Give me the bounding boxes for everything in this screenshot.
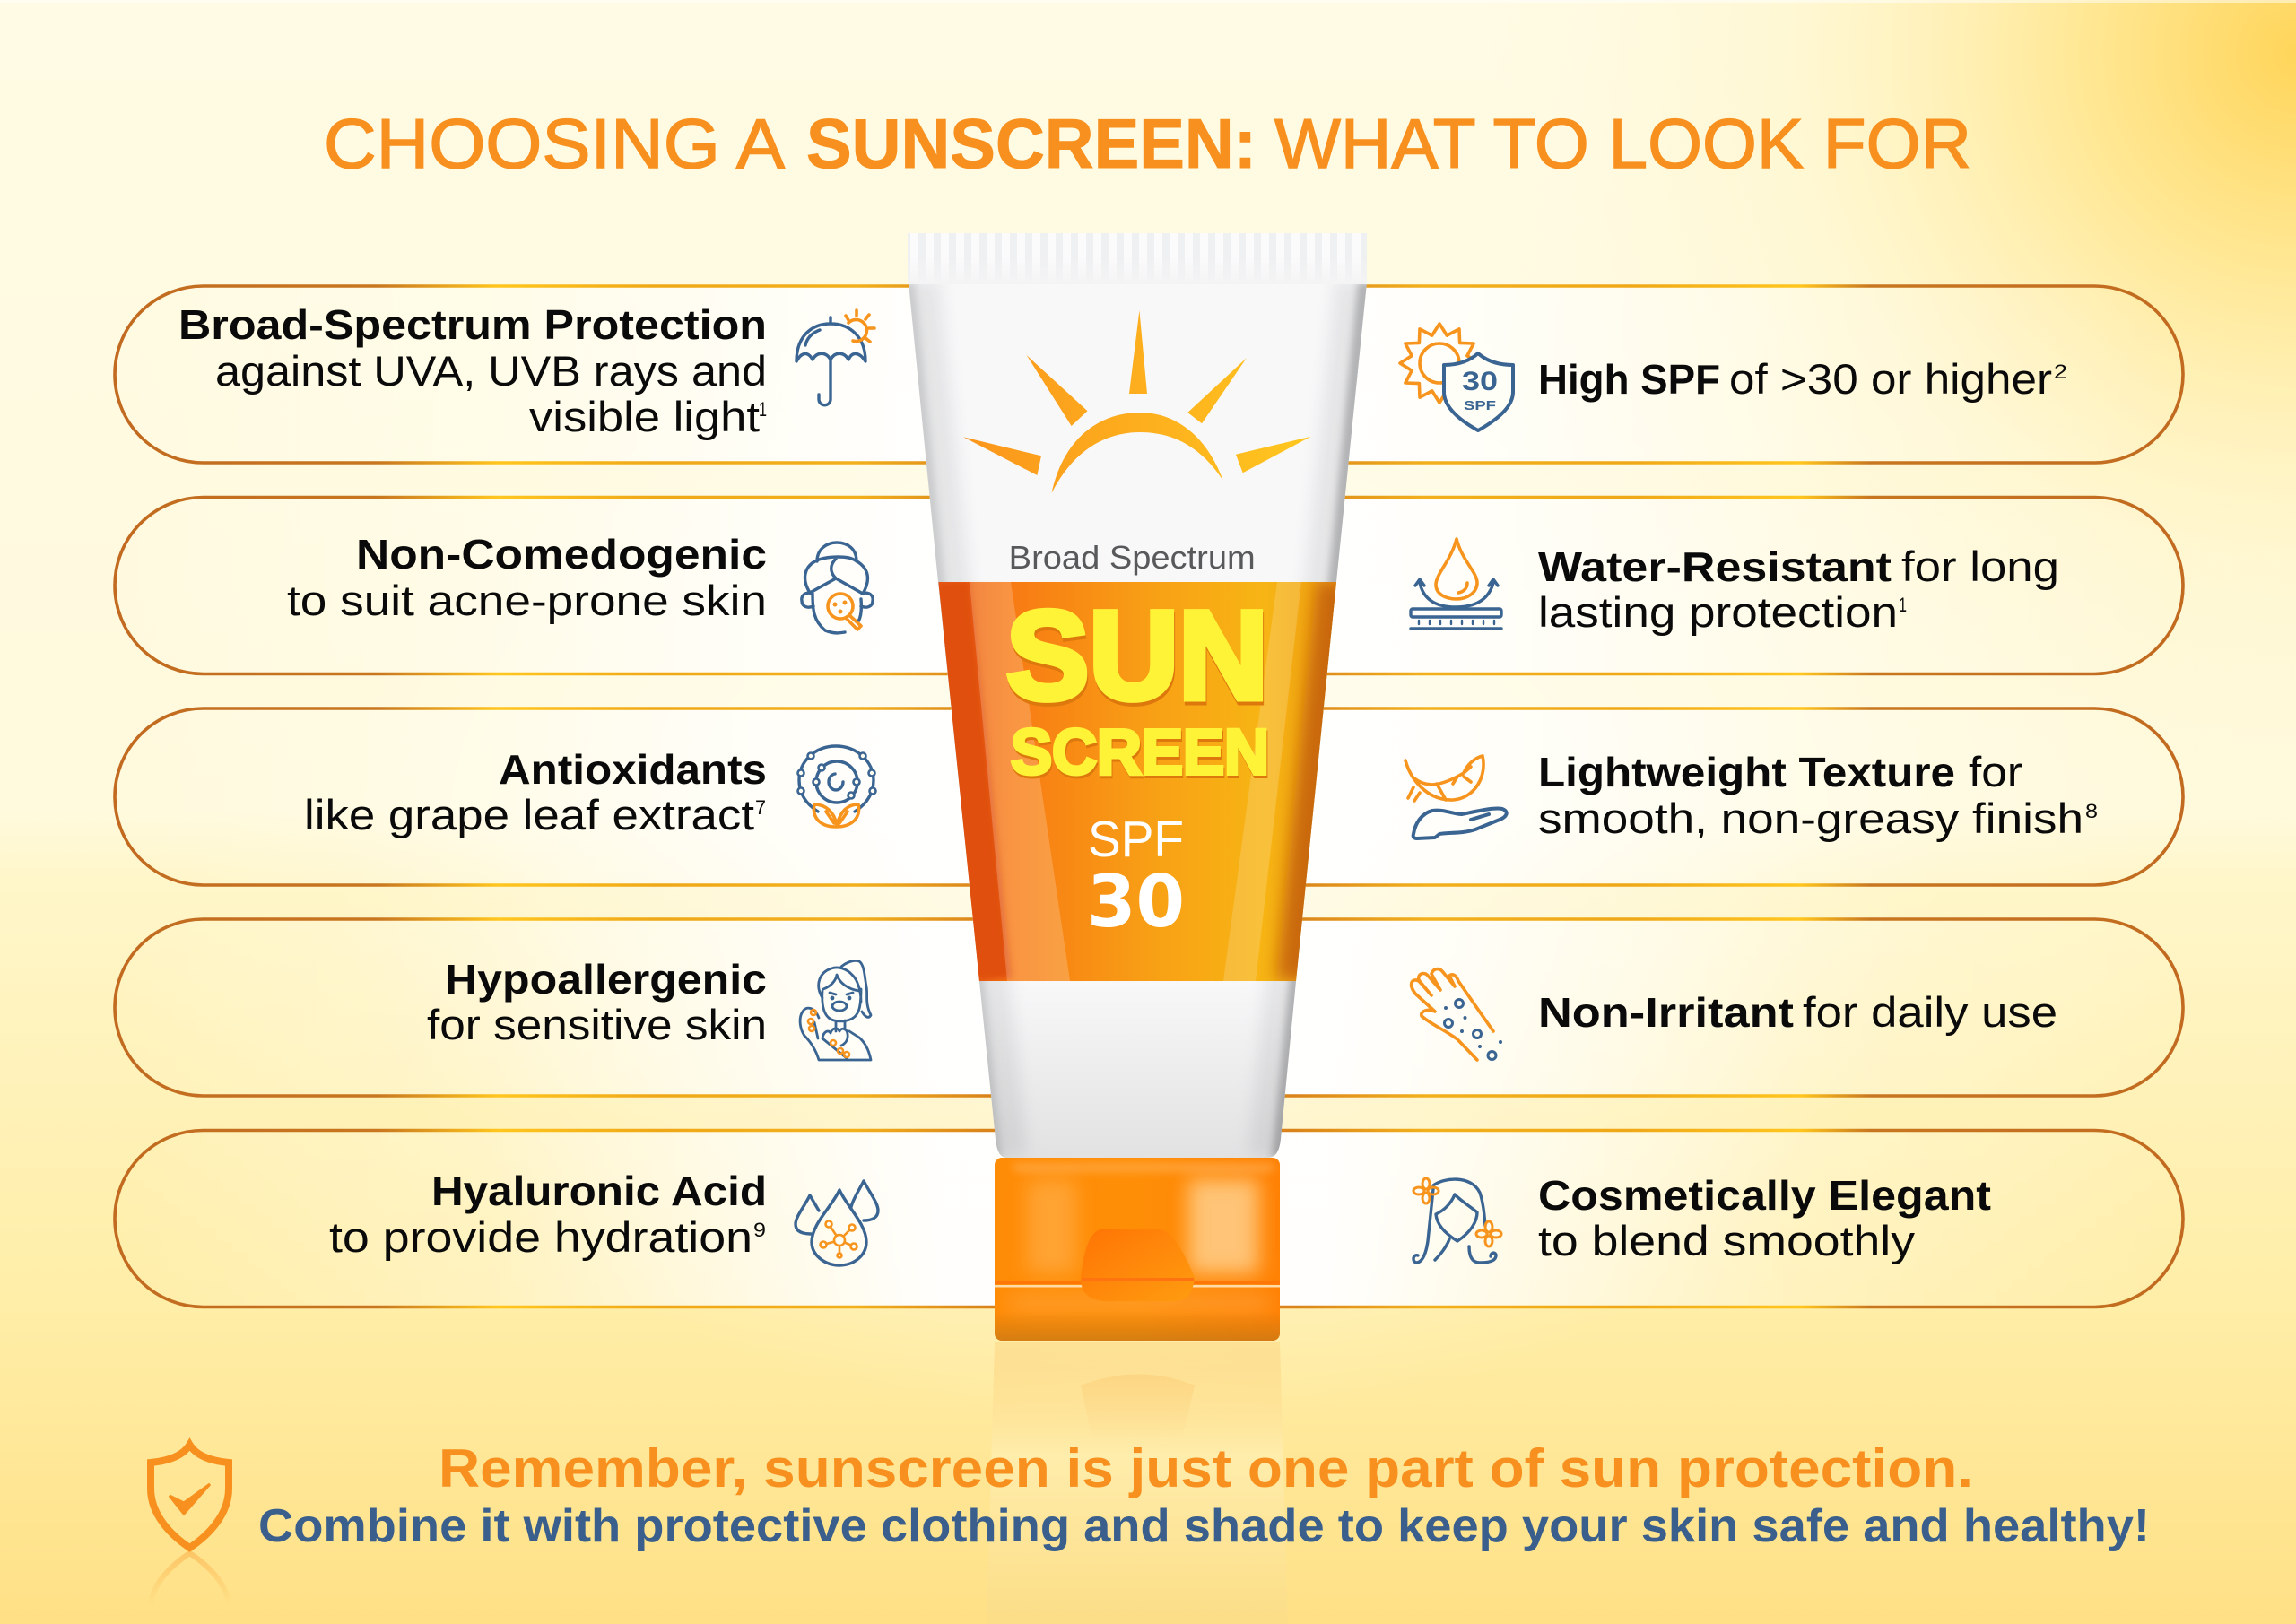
description: to blend smoothly [1538,1217,1916,1264]
description: for sensitive skin [427,1001,767,1048]
tube cap [995,1158,1280,1341]
panel: Hypoallergenic [115,919,1137,1096]
tube body [909,284,1367,1158]
icon: face with magnifier [802,543,873,633]
icon: hand with irritation [1412,969,1502,1060]
heading: Water-Resistant [1538,543,1892,590]
icon: SPF 30 shield and sun: SPF [1464,398,1496,413]
description: against UVA, UVB rays and [215,347,767,395]
description line 2: smooth, non-greasy finish [1538,795,2083,842]
title: WHAT TO LOOK FOR [1274,104,1971,183]
heading: Hyaluronic Acid [431,1168,767,1214]
superscript: 1 [1899,594,1907,616]
icon: woman with irritated skin [800,960,871,1060]
icon: antioxidant rings and leaves [798,746,875,827]
orange label band [933,578,1345,986]
icon: SPF 30 shield and sun: 30 [1462,367,1498,396]
panel: Water-Resistant [1157,497,2183,674]
panel: High SPF [1157,286,2183,463]
heading: Cosmetically Elegant [1538,1172,1991,1219]
sun logo [963,310,1311,493]
icon: feather over hand [1405,756,1507,838]
title: SUNSCREEN: [806,104,1257,183]
icon: water drop on surface [1411,539,1501,629]
icon: hyaluronic acid drops [796,1181,878,1265]
icon: SPF 30 shield and sun [1400,324,1513,430]
SPF number: 30 [1087,860,1185,943]
panel: Non-Irritant [1157,919,2183,1096]
superscript: 2 [2054,360,2067,383]
product descriptor: Broad Spectrum [1009,539,1256,576]
title: CHOOSING A [324,104,785,183]
reminder line: Remember, sunscreen is just one part of sun protection. [439,1438,1973,1498]
description: for daily use [1803,988,2057,1036]
SPF label: SPF [1088,811,1184,868]
tube reflection [987,1342,1288,1624]
panel: Antioxidants [115,708,1137,885]
description: to suit acne-prone skin [287,577,767,624]
heading: Lightweight Texture [1538,749,1955,795]
superscript: 1 [759,398,767,421]
icon: woman with flowers [1413,1178,1501,1263]
brand: SCREEN: SCREEN [1011,717,1269,788]
title [324,104,1971,183]
description: for [1969,748,2022,795]
panel: Broad-Spectrum Protection [115,286,1137,463]
panel: Non-Comedogenic [115,497,1137,674]
cap notch [1081,1229,1195,1301]
panel: Lightweight Texture [1157,708,2183,885]
description: for long [1901,543,2059,590]
heading: High SPF [1538,356,1720,403]
heading: Broad-Spectrum Protection [178,301,767,348]
heading: Antioxidants [499,746,767,793]
brand: SUN: SUN [1006,585,1268,725]
panel: Hyaluronic Acid [115,1130,1137,1307]
superscript: 9 [753,1219,766,1241]
description line 2: lasting protection [1538,588,1898,636]
advice line: Combine it with protective clothing and shade to keep your skin safe and healthy! [258,1500,2150,1552]
callout: reminder text [258,1438,2150,1552]
description: like grape leaf extract [304,791,754,838]
panel: Cosmetically Elegant [1157,1130,2183,1307]
heading: Hypoallergenic [445,956,767,1003]
superscript: 8 [2085,800,2098,822]
callout: shield check icon [151,1445,229,1605]
description: of >30 or higher [1729,355,2052,403]
superscript: 7 [755,796,766,819]
heading: Non-Comedogenic [356,531,767,578]
sunscreen tube [897,224,1381,1341]
description line 2: visible light [529,393,760,440]
icon: umbrella and sun [796,310,874,405]
tube crimp [908,233,1367,284]
heading: Non-Irritant [1538,989,1794,1036]
description: to provide hydration [329,1213,752,1261]
